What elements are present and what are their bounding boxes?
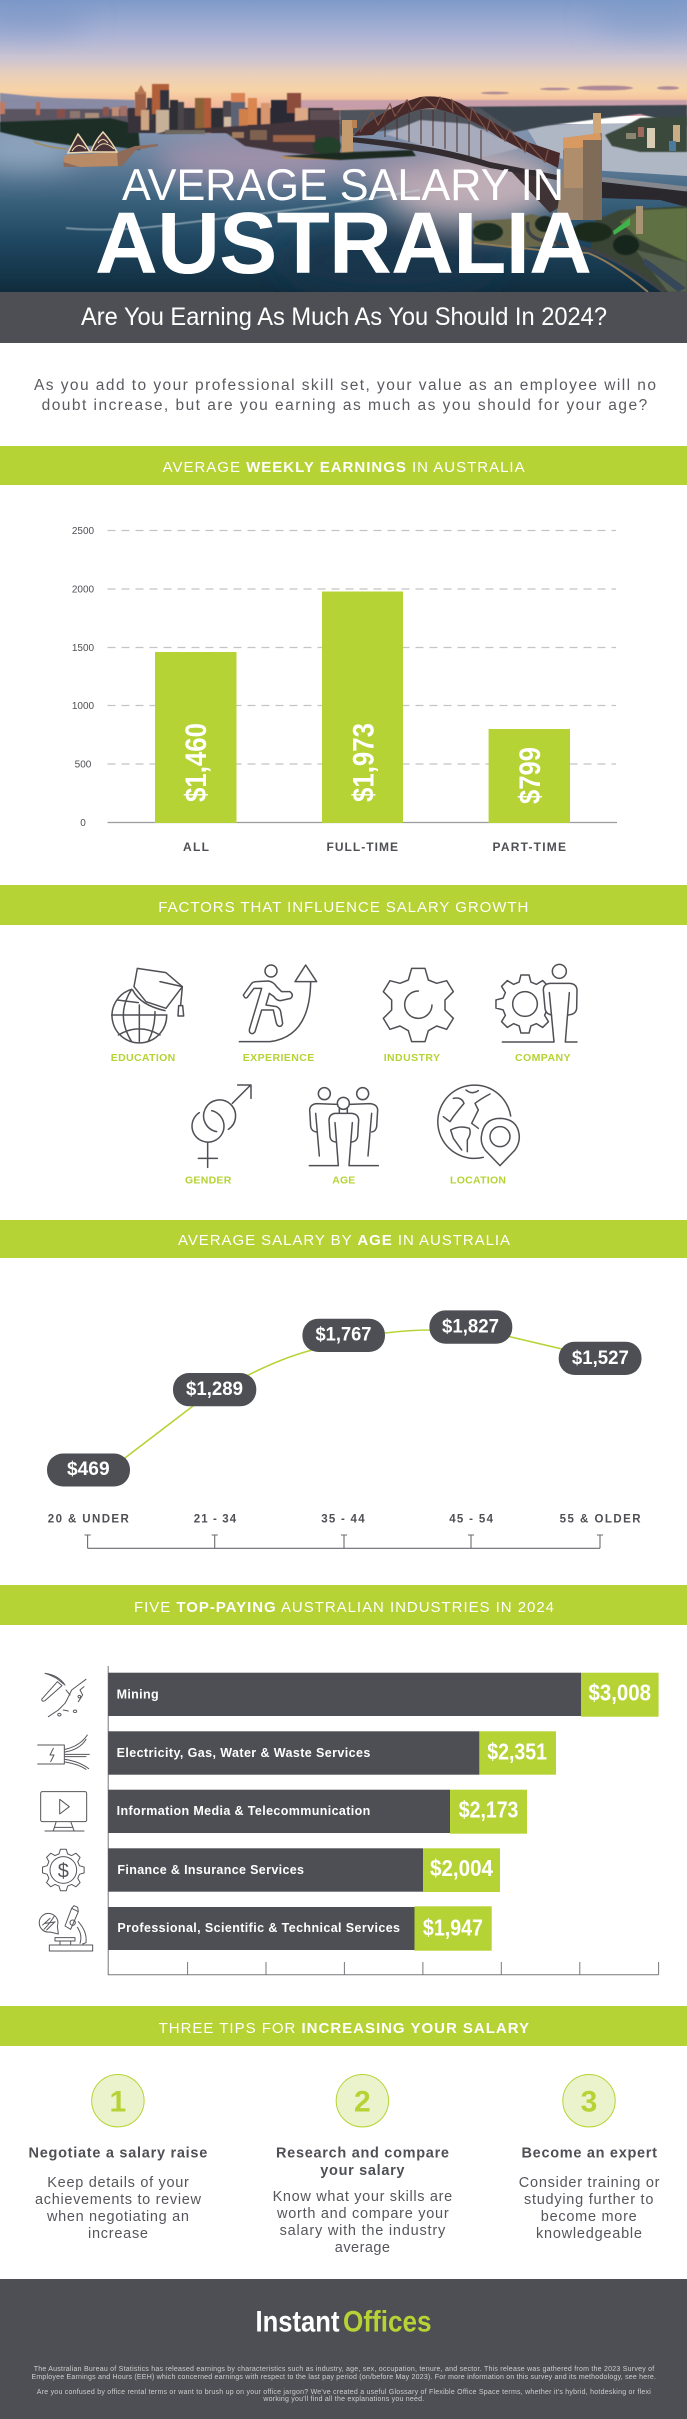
bar chart: weekly earnings [72, 526, 617, 854]
bar: electricity: $2,351 [487, 1738, 547, 1764]
subtitle text: Are You Earning As Much As You Should In 2024? [81, 303, 607, 331]
road curve [528, 222, 664, 292]
bar: mining: $3,008 [588, 1680, 651, 1706]
icon: education [112, 968, 184, 1043]
solar panels [644, 258, 686, 292]
logo: Instant [256, 2306, 340, 2339]
left shoreline [34, 142, 67, 149]
icon: location globe and pin [438, 1085, 519, 1166]
tip 1 heading: Negotiate a salary raise [28, 2146, 207, 2162]
icon: company gear and person [496, 964, 577, 1042]
lower park [636, 250, 687, 292]
icon: media monitor [41, 1792, 87, 1831]
value pill: 21-34: $1,289 [186, 1379, 243, 1400]
x axis labels: FULL-TIME [326, 840, 398, 854]
bridge background land [340, 108, 515, 136]
label: gender: GENDER [185, 1174, 232, 1186]
tip 2 body: average [335, 2240, 390, 2256]
dark trees left [0, 118, 140, 150]
opera house promontory [63, 144, 158, 167]
number badge 3: 3 [581, 2086, 597, 2119]
tip 2 heading: your salary [320, 2163, 404, 2179]
icon: age group [309, 1088, 378, 1166]
value pill: 55 and older: $1,527 [572, 1348, 629, 1369]
value pill: 55 and older [559, 1342, 642, 1375]
icon: science microscope [39, 1906, 93, 1951]
distant land right [440, 105, 687, 132]
tip 2 body: worth and compare your [276, 2206, 449, 2222]
footer [0, 2279, 687, 2419]
source note: Employee Earnings and Hours (EEH) which concerned earnings with respect to the last pay period (on/before May 2023). For more information on this survey and its methodology, see here. [32, 2374, 656, 2381]
section header: factors: FACTORS THAT INFLUENCE SALARY GROWTH [158, 899, 528, 916]
source note: Are you confused by office rental terms or want to brush up on your office jargon? We've created a useful Glossary of Flexible Office Space terms, whether it's hybrid, hotdesking or flexi [37, 2389, 651, 2396]
y axis labels: 1000 [72, 701, 95, 712]
icon: finance gear with dollar [43, 1849, 84, 1891]
tip 2 body: Know what your skills are [273, 2189, 452, 2205]
source note: The Australian Bureau of Statistics has released earnings by characteristics such as industry, age, sex, occupation, tenure, and sector. This release was gathered from the 2023 Survey of [34, 2366, 654, 2373]
number badge 1 [92, 2074, 144, 2127]
section header: factors [0, 885, 687, 925]
tip 1 body: Keep details of your [47, 2175, 189, 2191]
intro text: doubt increase, but are you earning as much as you should for your age? [42, 397, 648, 414]
bar: information media [108, 1790, 527, 1834]
number badge 2: 2 [354, 2086, 371, 2119]
tip 1 body: achievements to review [35, 2192, 202, 2208]
tip 1 body: increase [88, 2226, 148, 2242]
section header: three tips [0, 2006, 687, 2046]
icon: utilities cable box [38, 1735, 89, 1769]
source note [32, 2366, 656, 2403]
section header: top-paying industries [0, 1585, 687, 1625]
bar: electricity [108, 1731, 556, 1775]
age labels: 20 & UNDER [48, 1514, 129, 1526]
tip 1 body: when negotiating an [46, 2209, 189, 2225]
skyline [128, 84, 340, 133]
label: industry: INDUSTRY [384, 1052, 440, 1064]
label: experience: EXPERIENCE [243, 1052, 314, 1064]
far right shore with buildings [605, 116, 687, 152]
label: location: LOCATION [450, 1174, 506, 1186]
under-deck structure right [602, 182, 687, 207]
x axis labels: PART-TIME [492, 840, 566, 854]
tip 3 heading: Become an expert [522, 2146, 657, 2162]
intro text: As you add to your professional skill set, your value as an employee will no [34, 377, 656, 394]
icon: experience [239, 965, 317, 1042]
tip 3 body: studying further to [524, 2192, 653, 2208]
tip 3 [519, 2074, 660, 2242]
water under arch [385, 120, 520, 158]
bridge north pylon [556, 113, 602, 220]
water reflections [0, 132, 563, 261]
title line 2: AUSTRALIA [95, 195, 592, 292]
chart axes [108, 1666, 659, 1975]
section header: three tips: THREE TIPS FOR INCREASING YOUR SALARY [159, 2020, 529, 2037]
bridge arch [350, 96, 562, 213]
green fence [613, 218, 630, 235]
number badge 1: 1 [110, 2086, 126, 2119]
park ground right [590, 206, 687, 292]
bar: finance [108, 1848, 500, 1892]
age labels [48, 1514, 641, 1526]
label: age: AGE [332, 1174, 355, 1186]
tip 2 [273, 2074, 452, 2256]
bar: part-time [489, 729, 570, 823]
bar: all: $1,460 [180, 723, 213, 802]
boat wake [66, 190, 420, 230]
foreshore land [157, 120, 340, 158]
factors icons [111, 964, 577, 1186]
number badge 2 [336, 2074, 389, 2127]
y axis labels: 0 [80, 818, 86, 829]
bar: all [155, 652, 236, 823]
value pill: 21-34 [173, 1373, 256, 1406]
x axis labels [183, 840, 566, 854]
bar: professional: Professional, Scientific & Technical Services [117, 1921, 400, 1935]
intro text [34, 377, 656, 414]
bar: full-time [322, 592, 403, 823]
logo: Offices [343, 2306, 432, 2339]
x axis labels: ALL [183, 840, 209, 854]
bar: professional: $1,947 [423, 1914, 483, 1940]
bar: electricity: Electricity, Gas, Water & Waste Services [117, 1746, 370, 1760]
bar: finance: $2,004 [430, 1855, 493, 1881]
distant horizon [300, 100, 687, 109]
bar: information media: Information Media & Telecommunication [117, 1804, 370, 1818]
bridge roadway right [590, 178, 687, 189]
sky [0, 0, 687, 116]
icon: finance gear with dollar: $ [58, 1860, 69, 1882]
section header: weekly earnings [0, 446, 687, 485]
value pill: under 20: $469 [67, 1459, 110, 1480]
icon: gender [192, 1085, 251, 1167]
tip 2 heading: Research and compare [276, 2146, 449, 2162]
section header: weekly earnings: AVERAGE WEEKLY EARNINGS IN AUSTRALIA [163, 459, 525, 476]
value pill: 35-44 [302, 1319, 385, 1352]
age axis bracket [84, 1535, 603, 1548]
y axis labels [72, 526, 95, 829]
tip 2 body [273, 2189, 452, 2256]
north bridge stone pier [636, 206, 643, 234]
y axis labels: 500 [75, 760, 92, 770]
tip 1 body [35, 2175, 202, 2242]
value pill: 45-54 [429, 1310, 512, 1344]
logo [256, 2306, 432, 2339]
section header: salary by age: AVERAGE SALARY BY AGE IN AUSTRALIA [178, 1232, 510, 1249]
bar: full-time: $1,973 [347, 723, 380, 802]
pink clouds [481, 86, 679, 94]
icon: industry gear [383, 968, 453, 1042]
bar: mining: Mining [117, 1687, 159, 1701]
bar: finance: Finance & Insurance Services [117, 1863, 304, 1877]
peninsula trees [473, 216, 639, 255]
value pill: 45-54: $1,827 [442, 1317, 499, 1338]
bar: mining [108, 1673, 659, 1717]
number badge 3 [563, 2074, 615, 2127]
harbour wall [474, 243, 648, 292]
label: education: EDUCATION [111, 1052, 175, 1064]
y axis labels: 2500 [72, 526, 95, 537]
tip 1 [28, 2074, 207, 2242]
label: company: COMPANY [515, 1052, 570, 1064]
section header: salary by age [0, 1220, 687, 1258]
age labels: 35 - 44 [321, 1514, 365, 1526]
opera house [63, 132, 158, 167]
age labels: 55 & OLDER [560, 1514, 641, 1526]
opera house base [63, 152, 118, 167]
tip 3 body: knowledgeable [536, 2226, 642, 2242]
y axis labels: 2000 [72, 584, 95, 596]
bar: information media: $2,173 [459, 1797, 518, 1823]
upper harbour water, right [525, 122, 687, 176]
opera house sails [68, 132, 117, 153]
bar chart: industries [108, 1666, 659, 1975]
point shoreline [281, 156, 340, 160]
water [0, 124, 687, 292]
line chart: salary by age [47, 1310, 642, 1548]
hero photo: Sydney harbour [0, 0, 687, 294]
tip 2 heading [276, 2146, 449, 2179]
section header: top-paying industries: FIVE TOP-PAYING AUSTRALIAN INDUSTRIES IN 2024 [134, 1599, 554, 1616]
bridge south pylon [342, 120, 357, 153]
small peninsula [474, 214, 556, 248]
y axis labels: 1500 [72, 643, 95, 654]
left point land [282, 150, 416, 160]
value pill: under 20 [47, 1454, 130, 1486]
sky shading [0, 0, 687, 36]
tip 3 body [519, 2175, 660, 2242]
trend line [100, 1327, 600, 1477]
bar: professional [108, 1906, 492, 1951]
value pill: 35-44: $1,767 [316, 1325, 372, 1346]
source note: working you'll find all the explanations you need. [262, 2396, 424, 2403]
grass [620, 208, 687, 262]
bar: part-time: $799 [514, 747, 547, 804]
tip 2 body: salary with the industry [280, 2223, 446, 2239]
title line 1: AVERAGE SALARY IN [122, 161, 564, 210]
age labels: 21 - 34 [194, 1514, 237, 1526]
left shore city band [0, 102, 140, 125]
age labels: 45 - 54 [449, 1514, 494, 1526]
icon: mining pickaxe [42, 1673, 86, 1717]
subtitle band [0, 292, 687, 343]
rocks district rooftops [165, 130, 341, 155]
tip 3 body: Consider training or [519, 2175, 660, 2191]
tip 3 body: become more [541, 2209, 637, 2225]
distant haze clouds [0, 93, 135, 112]
